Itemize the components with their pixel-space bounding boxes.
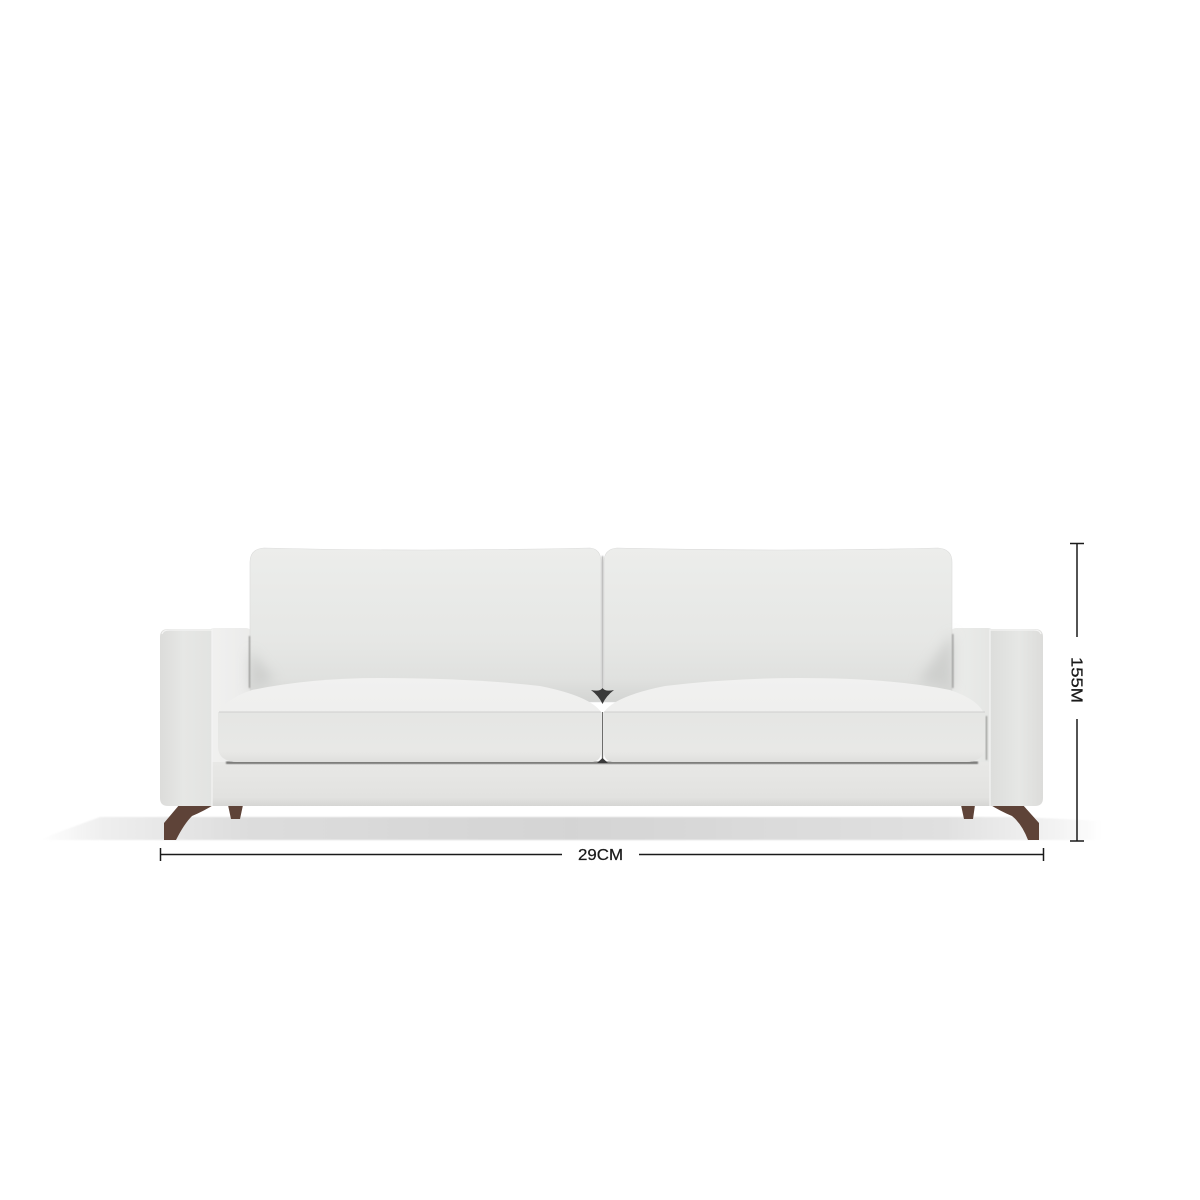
left back cushion (250, 548, 601, 702)
width label: 29CM (578, 847, 623, 864)
left arm inner (208, 628, 252, 768)
lower centre notch (597, 758, 608, 763)
left seat cushion (218, 678, 601, 762)
width dimension (160, 847, 1044, 864)
left leg (164, 804, 243, 840)
height dimension (1068, 544, 1084, 841)
centre dark star (591, 688, 614, 704)
right arm inner (950, 628, 994, 768)
seat seam shadow (226, 762, 978, 764)
height label: 155M (1068, 657, 1084, 703)
sofa (160, 548, 1043, 840)
centre seat gap (602, 712, 604, 762)
right leg (961, 804, 1039, 840)
right arm front (990, 629, 1043, 806)
dark gap lines (250, 556, 986, 760)
floor shadow (40, 817, 1105, 840)
right seat cushion (604, 678, 985, 762)
left arm front (160, 629, 212, 806)
right back cushion (604, 548, 952, 702)
back cushion shadows (250, 632, 953, 690)
sofa base (210, 762, 992, 806)
